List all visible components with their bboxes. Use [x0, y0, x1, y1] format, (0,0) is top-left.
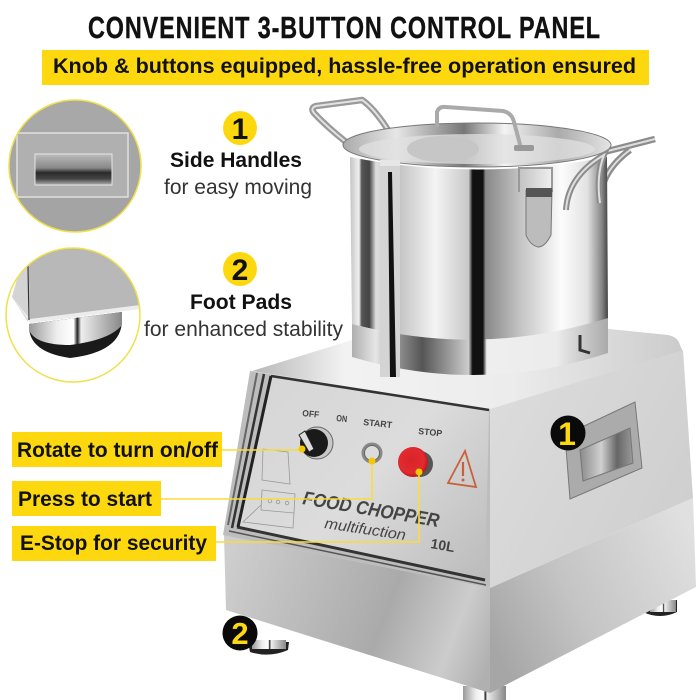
marker 2 on machine: [222, 616, 258, 651]
vertical rod: [380, 160, 400, 377]
label: press to start: Press to start: [18, 488, 152, 511]
text: foot pads: [144, 291, 343, 341]
bowl body: [350, 157, 608, 340]
bowl lower band: [352, 318, 608, 375]
base front control panel: FOOD CHOPPER: [301, 488, 441, 532]
stop button: [398, 447, 433, 477]
inset: foot pad close-up: [6, 240, 145, 382]
text: foot pads: Foot Pads: [190, 291, 292, 314]
bowl handle right: [600, 139, 655, 203]
base right side lower: [490, 498, 696, 693]
bowl latch: [519, 168, 552, 247]
bowl lid: [343, 107, 611, 167]
callout lines: [161, 446, 422, 542]
feet: [248, 600, 677, 700]
label: rotate to turn on/off: [12, 432, 222, 467]
badge 1: 1: [232, 113, 248, 146]
label: rotate to turn on/off: Rotate to turn on/off: [17, 439, 219, 462]
subtitle banner: Knob & buttons equipped, hassle-free operation ensured: [53, 55, 636, 78]
bowl handle right legs: [566, 155, 604, 210]
bowl catch: [580, 335, 590, 353]
label: e-stop for security: E-Stop for security: [20, 532, 207, 555]
base front control panel: STOP: [418, 426, 443, 438]
text: side handles: Side Handles: [170, 149, 302, 172]
warning triangle: [448, 451, 476, 487]
base right side upper: [490, 350, 693, 588]
marker 2 on machine: 2: [231, 616, 249, 651]
text: foot pads: for enhanced stability: [144, 318, 343, 341]
base top surface: [252, 328, 683, 409]
knob: [299, 427, 333, 459]
text: side handles: for easy moving: [164, 176, 312, 199]
text: side handles: [164, 149, 312, 199]
label: press to start: [12, 481, 161, 516]
base front control panel: 10L: [429, 535, 456, 555]
base front control panel: START: [363, 417, 393, 430]
bowl handle left: [312, 100, 388, 142]
start button: [362, 442, 382, 464]
badge 2: 2: [232, 254, 248, 287]
base front control panel: OFF: [302, 408, 320, 420]
badge 1: [223, 111, 257, 146]
marker 1 on machine: [550, 416, 586, 452]
base front control panel: [223, 371, 490, 588]
marker 1 on machine: 1: [558, 416, 576, 452]
base front control panel: multifuction: [323, 515, 407, 544]
food chopper machine: [223, 100, 696, 700]
badge 2: [223, 252, 257, 287]
base front control panel: ON: [336, 413, 348, 424]
base front lower: [224, 535, 490, 693]
side handle recess: [565, 402, 642, 499]
label: e-stop for security: [12, 526, 216, 561]
inset: side handle close-up: [8, 100, 142, 238]
subtitle banner: [42, 50, 649, 85]
